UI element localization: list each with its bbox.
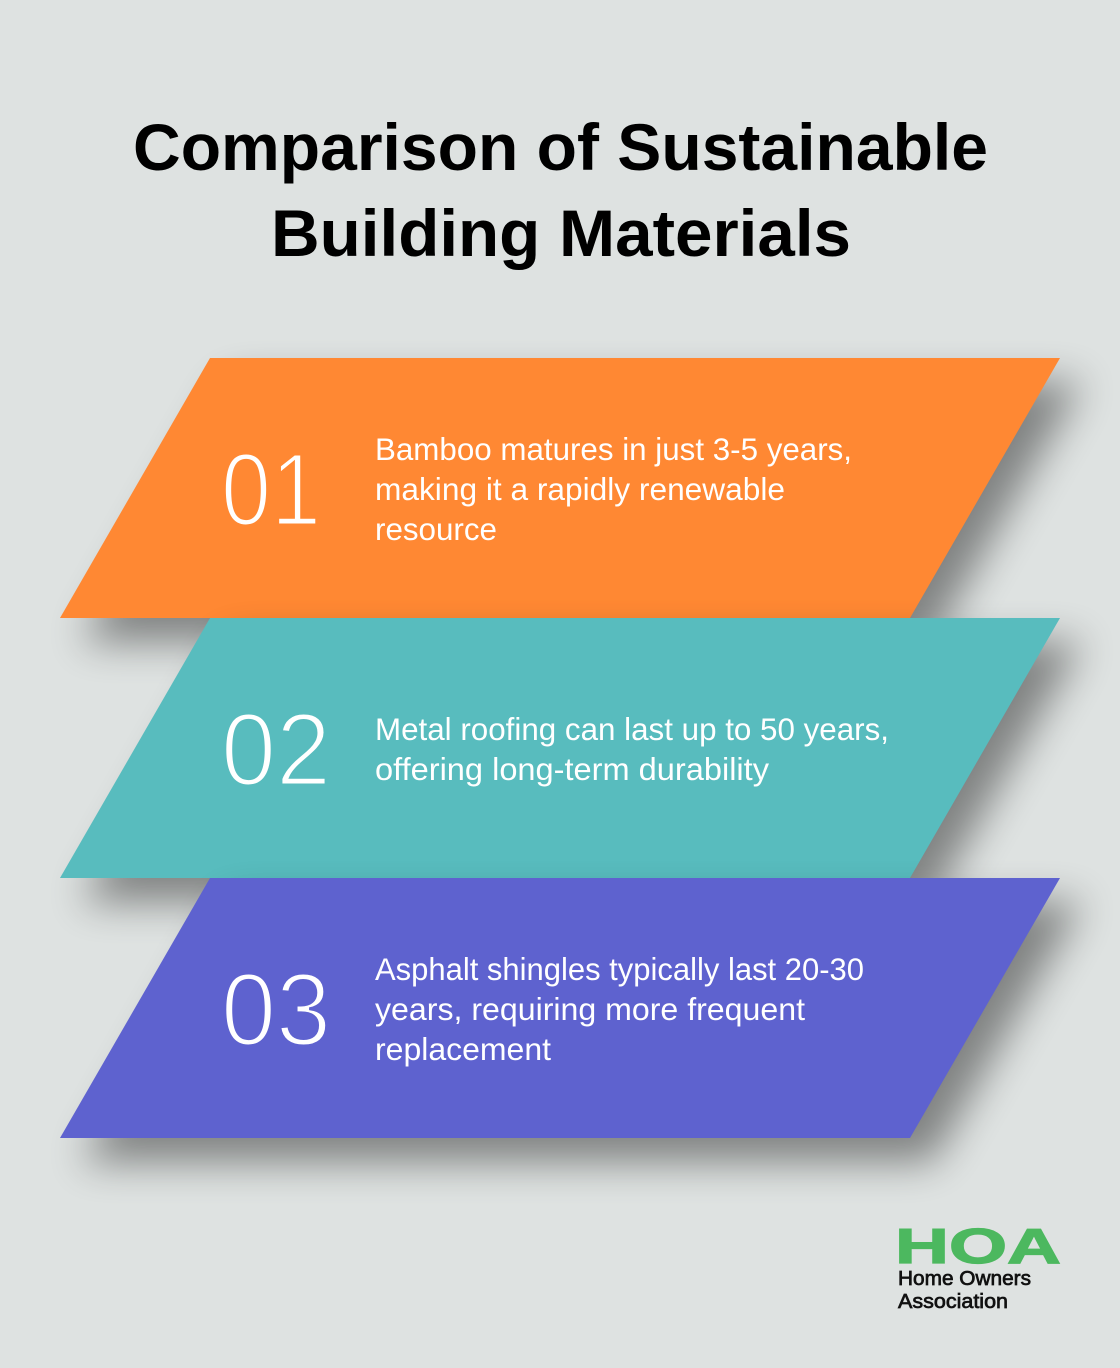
text: asphalt shingles <box>375 951 864 1067</box>
text: asphalt shingles: replacement <box>375 1031 551 1067</box>
panel: step 03 asphalt shingles <box>60 878 1082 1162</box>
text: metal roofing <box>375 711 889 787</box>
logo: HOA Home Owners Association: Association <box>898 1291 1008 1313</box>
title <box>133 110 988 270</box>
title: Comparison of Sustainable <box>133 110 988 184</box>
text: bamboo: Bamboo matures in just 3-5 years, <box>375 431 852 467</box>
number 02: 02 <box>221 692 331 807</box>
text: bamboo: making it a rapidly renewable <box>375 471 785 507</box>
number 03: 03 <box>221 952 331 1067</box>
logo: HOA Home Owners Association <box>895 1220 1061 1313</box>
logo: HOA Home Owners Association: Home Owners <box>898 1268 1031 1290</box>
title: Building Materials <box>271 196 851 270</box>
text: bamboo: resource <box>375 511 497 547</box>
panel: step 01 bamboo <box>60 358 1082 642</box>
panel: step 02 metal roofing <box>60 618 1082 902</box>
text: metal roofing: Metal roofing can last up to 50 years, <box>375 711 889 747</box>
text: bamboo <box>375 431 852 547</box>
text: metal roofing: offering long-term durability <box>375 751 769 787</box>
number 01: 01 <box>221 432 321 547</box>
logo: HOA Home Owners Association: HOA <box>895 1220 1061 1274</box>
text: asphalt shingles: years, requiring more frequent <box>375 991 805 1027</box>
text: asphalt shingles: Asphalt shingles typically last 20-30 <box>375 951 864 987</box>
